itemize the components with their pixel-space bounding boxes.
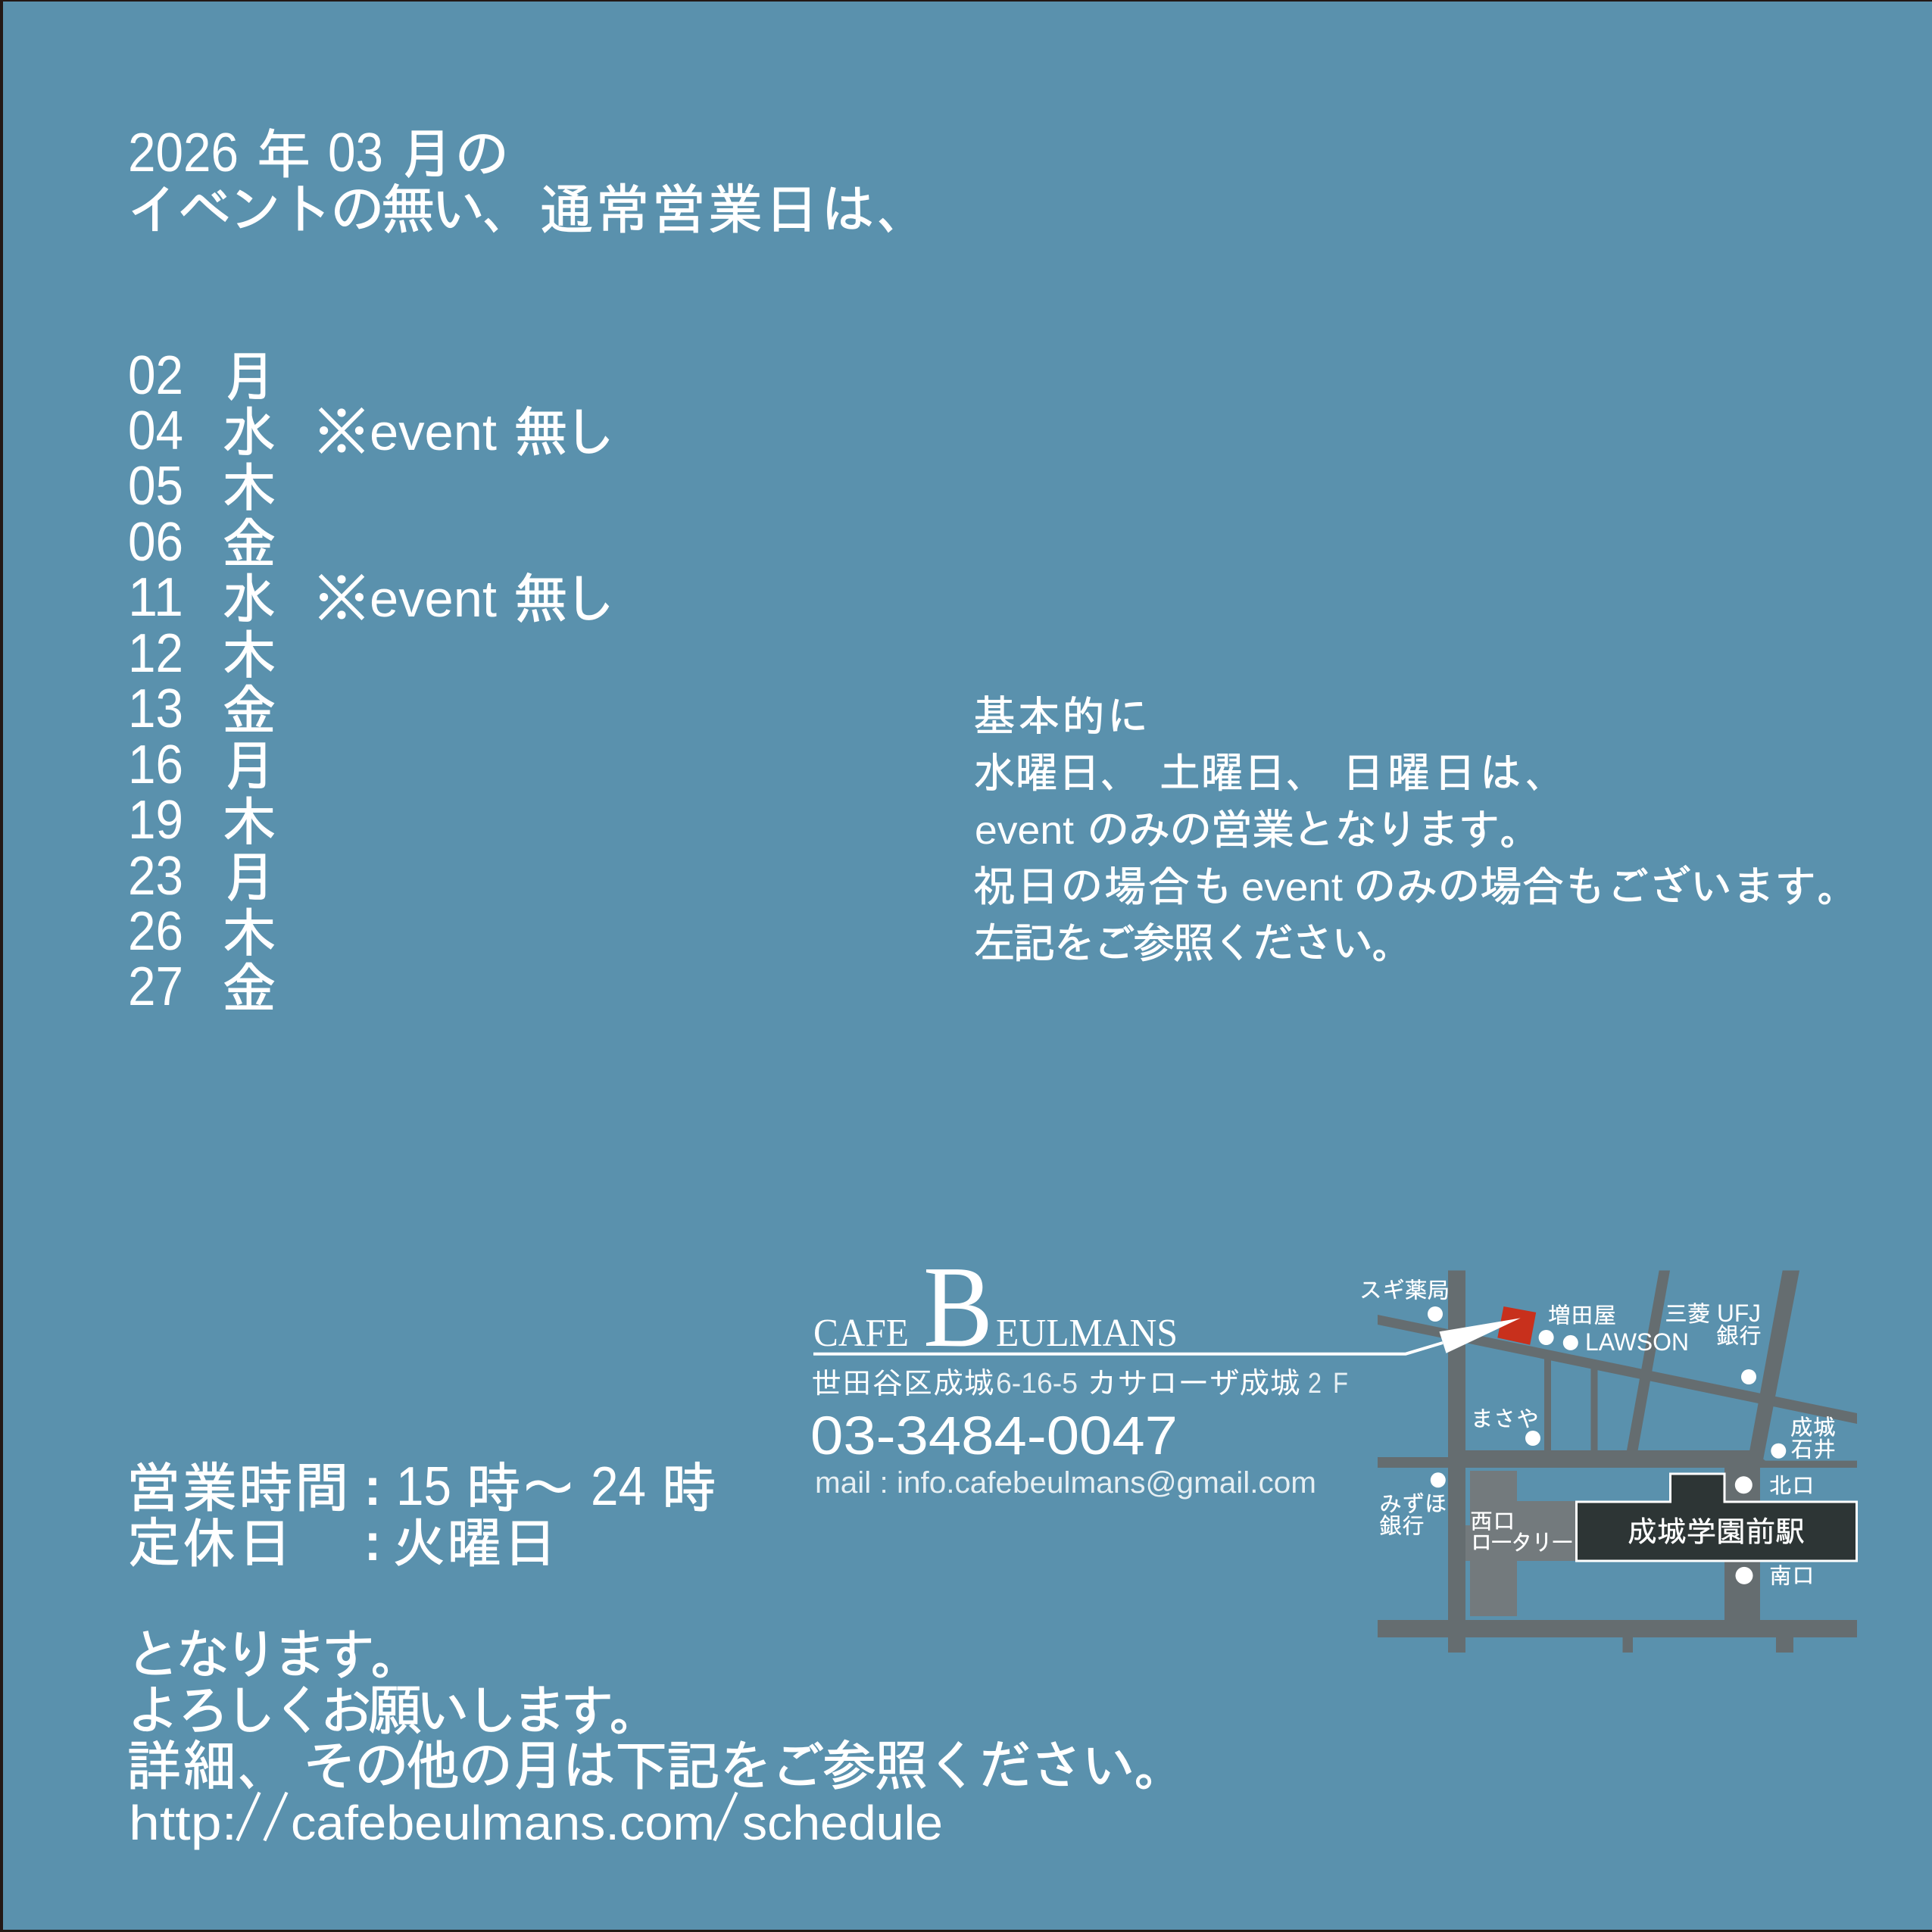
map labels: みずほ <box>1379 1492 1447 1515</box>
opening hours: 24 <box>591 1456 646 1517</box>
opening hours: 15 <box>396 1456 451 1517</box>
row 26: 26 <box>128 901 183 962</box>
opening hours: ～ <box>521 1459 576 1514</box>
row 02: 月 <box>222 348 276 403</box>
schedule URL <box>129 1790 943 1850</box>
closing message: となります。 <box>126 1626 425 1681</box>
roads <box>1378 1271 1857 1653</box>
row 04: し <box>562 404 616 458</box>
row 12: 木 <box>222 626 276 681</box>
map labels: UFJ <box>1717 1300 1761 1327</box>
row 23: 月 <box>222 849 276 904</box>
row 02: 02 <box>128 345 183 406</box>
row 05: 05 <box>128 456 183 517</box>
row 02 <box>128 345 276 406</box>
cafe location marker <box>1497 1306 1536 1345</box>
station building <box>1577 1474 1857 1561</box>
notice text block: 土曜日、 <box>1159 751 1328 793</box>
notice text block <box>973 694 1859 963</box>
row 11: event <box>370 570 497 628</box>
heading: month: 03 <box>328 123 383 183</box>
row 04: 04 <box>128 401 183 461</box>
closing message: よろしくお願いします。 <box>126 1682 663 1737</box>
notice text block: 基本的に <box>973 694 1149 736</box>
row 11: 水 <box>222 570 276 625</box>
row 13 <box>128 679 276 739</box>
row 13: 金 <box>222 682 276 736</box>
row 19 <box>128 790 276 851</box>
heading: regular days: イベントの無い、 <box>126 181 537 236</box>
row 05: 木 <box>222 459 276 513</box>
closing message <box>126 1626 1188 1792</box>
address <box>811 1367 1348 1400</box>
opening hours: : <box>359 1459 386 1514</box>
opening hours: 営業時間 <box>126 1459 349 1514</box>
notice text block: 左記をご参照ください。 <box>973 921 1414 963</box>
landmark dots <box>1428 1306 1786 1584</box>
row 19: 木 <box>222 793 276 847</box>
opening hours: 時 <box>467 1459 521 1514</box>
row 26 <box>128 901 276 962</box>
schedule URL: / <box>262 1790 289 1844</box>
notice text block: 祝日の場合も <box>973 864 1234 907</box>
address: 2 <box>1308 1368 1322 1400</box>
heading: month: 月 <box>399 126 454 180</box>
map labels: 銀行 <box>1379 1514 1425 1537</box>
row 16: 16 <box>128 735 183 795</box>
row 06: 06 <box>128 512 183 573</box>
row 27: 金 <box>222 960 276 1014</box>
email: mail : info.cafebeulmans@gmail.com <box>815 1466 1316 1500</box>
notice text block: event <box>1241 866 1344 910</box>
map labels: 銀行 <box>1716 1324 1762 1347</box>
address: 世田谷区成城 <box>811 1367 994 1397</box>
map labels: 南口 <box>1769 1564 1815 1587</box>
map labels: 西口 <box>1470 1509 1515 1532</box>
closed day: 定休日 <box>126 1515 292 1569</box>
map labels: 三菱 <box>1665 1302 1710 1325</box>
address: カサローザ成城 <box>1087 1367 1300 1397</box>
opening hours: 時 <box>662 1459 716 1514</box>
row 04: 水 <box>222 404 276 458</box>
opening hours <box>126 1456 716 1517</box>
map labels: ロータリー <box>1470 1531 1574 1553</box>
row 12 <box>128 623 276 684</box>
row 04: ※ <box>314 404 369 458</box>
row 16 <box>128 735 276 795</box>
row 11 <box>128 567 616 628</box>
row 27: 27 <box>128 957 183 1017</box>
west rotary <box>1465 1471 1577 1616</box>
row 04: 無 <box>513 404 568 458</box>
cafe logo: B <box>923 1243 993 1372</box>
map labels: 成城 <box>1790 1415 1836 1438</box>
row 05 <box>128 456 276 517</box>
notice text block: のみの場合もございます。 <box>1353 864 1859 907</box>
cafe logo: CAFE <box>813 1312 909 1355</box>
heading: regular days continued: 通常営業日は、 <box>539 181 932 236</box>
notice text block: 日曜日は、 <box>1342 751 1568 793</box>
map labels: 増田屋 <box>1548 1303 1616 1326</box>
address: F <box>1333 1368 1348 1400</box>
map labels: 石井 <box>1790 1437 1836 1460</box>
closed day: 火曜日 <box>392 1515 557 1569</box>
map labels <box>1359 1278 1836 1587</box>
notice text block: 水曜日、 <box>973 751 1143 793</box>
row 06: 金 <box>222 515 276 570</box>
access map <box>813 1271 1857 1653</box>
notice text block: event <box>975 809 1075 853</box>
schedule URL: / <box>712 1790 739 1844</box>
row 11: 無 <box>513 570 568 625</box>
heading: month: の <box>454 126 509 180</box>
map labels: スギ薬局 <box>1359 1278 1450 1301</box>
row 23 <box>128 846 276 907</box>
notice text block: のみの営業となります。 <box>1087 807 1542 850</box>
schedule URL: / <box>235 1790 262 1844</box>
map labels: 北口 <box>1769 1474 1815 1497</box>
closed day <box>126 1515 557 1569</box>
row 12: 12 <box>128 623 183 684</box>
row 04 <box>128 401 616 461</box>
schedule URL: http: <box>129 1796 237 1850</box>
address: 6-16-5 <box>996 1368 1078 1400</box>
phone number: 03-3484-0047 <box>810 1406 1178 1466</box>
arrow to cafe <box>813 1318 1521 1354</box>
row 27 <box>128 957 276 1017</box>
cafe logo <box>813 1243 1178 1372</box>
map labels: LAWSON <box>1585 1328 1689 1356</box>
row 23: 23 <box>128 846 183 907</box>
map labels: まさや <box>1471 1407 1539 1430</box>
map labels: 成城学園前駅 <box>1628 1516 1805 1546</box>
cafe logo: EULMANS <box>996 1312 1178 1355</box>
row 19: 19 <box>128 790 183 851</box>
heading: month: 年 <box>256 126 311 180</box>
row 11: 11 <box>128 567 183 628</box>
row 11: し <box>562 570 616 625</box>
closed day: : <box>359 1515 386 1569</box>
row 13: 13 <box>128 679 183 739</box>
row 06 <box>128 512 276 573</box>
heading: month: 2026 <box>128 123 239 183</box>
heading: month <box>128 123 509 183</box>
schedule URL: schedule <box>742 1796 943 1850</box>
list of open days <box>128 345 616 1017</box>
closing message: その他の月は下記をご参照ください。 <box>302 1737 1188 1792</box>
row 11: ※ <box>314 570 369 625</box>
row 16: 月 <box>222 738 276 792</box>
row 04: event <box>370 404 497 461</box>
closing message: 詳細、 <box>126 1737 292 1792</box>
row 26: 木 <box>222 904 276 959</box>
schedule URL: cafebeulmans.com <box>291 1796 715 1850</box>
